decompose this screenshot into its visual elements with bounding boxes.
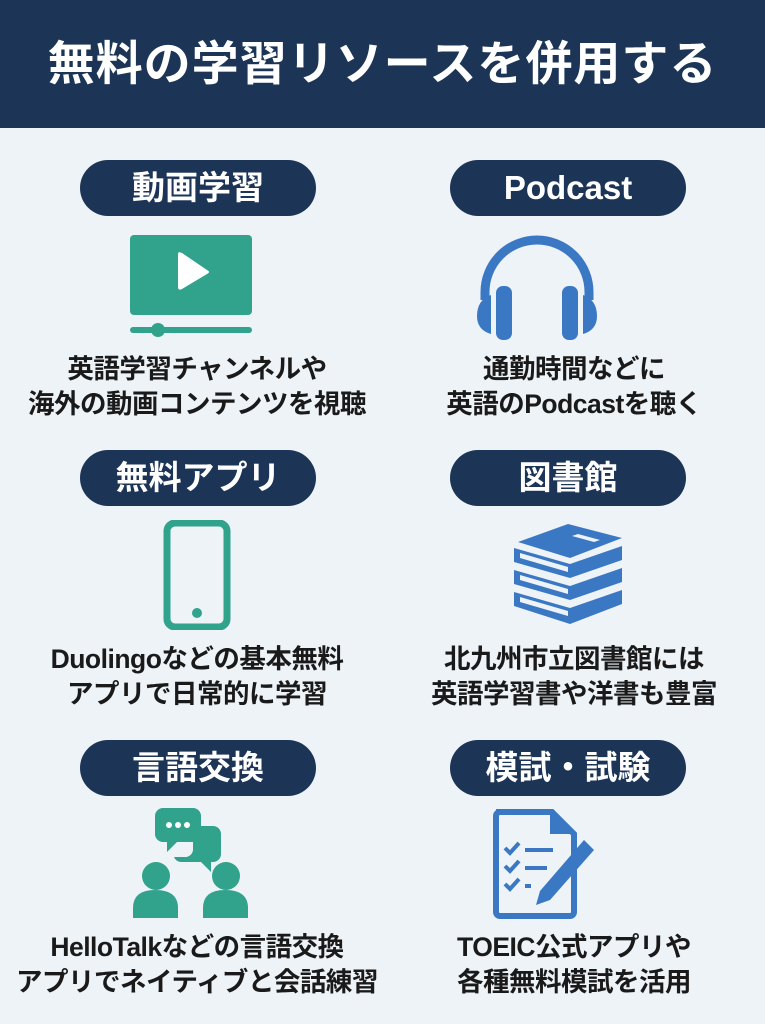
text: library bbox=[431, 644, 717, 709]
title bbox=[0, 0, 765, 128]
text: podcast bbox=[446, 354, 702, 419]
panel: video bbox=[28, 160, 366, 419]
panel: podcast bbox=[446, 160, 702, 419]
icon: headphones bbox=[477, 236, 597, 340]
pill: podcast: Podcast bbox=[504, 169, 632, 206]
panel: tests bbox=[450, 740, 691, 997]
panel: exchange bbox=[16, 740, 378, 997]
text: library: 英語学習書や洋書も豊富 bbox=[431, 679, 717, 709]
text: app: Duolingoなどの基本無料 bbox=[51, 644, 343, 674]
text: library: 北九州市立図書館には bbox=[444, 644, 704, 674]
text: tests: 各種無料模試を活用 bbox=[457, 967, 691, 997]
text: tests: TOEIC公式アプリや bbox=[457, 932, 691, 962]
panel: library bbox=[431, 450, 717, 709]
icon: books bbox=[514, 524, 622, 624]
icon: video player bbox=[130, 235, 252, 337]
pill: tests: 模試・試験 bbox=[486, 749, 650, 786]
pill: podcast bbox=[450, 160, 686, 216]
pill: library bbox=[450, 450, 686, 506]
pill: app bbox=[80, 450, 316, 506]
text: video: 英語学習チャンネルや bbox=[67, 354, 327, 384]
icon: people chatting bbox=[133, 808, 248, 918]
panel: app bbox=[51, 450, 344, 709]
pill: app: 無料アプリ bbox=[116, 459, 280, 496]
pill: video bbox=[80, 160, 316, 216]
icon: smartphone bbox=[164, 520, 230, 630]
icon: checklist with pencil bbox=[493, 809, 594, 919]
text: video: 海外の動画コンテンツを視聴 bbox=[28, 389, 366, 419]
pill: exchange: 言語交換 bbox=[132, 749, 264, 786]
text: podcast: 英語のPodcastを聴く bbox=[446, 389, 702, 419]
text: exchange bbox=[16, 932, 378, 997]
text: exchange: HelloTalkなどの言語交換 bbox=[50, 932, 344, 962]
pill: video: 動画学習 bbox=[132, 169, 264, 206]
text: app bbox=[51, 644, 344, 709]
pill: exchange bbox=[80, 740, 316, 796]
text: video bbox=[28, 354, 366, 419]
text: tests bbox=[457, 932, 691, 997]
text: podcast: 通勤時間などに bbox=[483, 354, 665, 384]
text: exchange: アプリでネイティブと会話練習 bbox=[16, 967, 378, 997]
title: 無料の学習リソースを併用する bbox=[48, 37, 717, 90]
pill: tests bbox=[450, 740, 686, 796]
text: app: アプリで日常的に学習 bbox=[67, 679, 327, 709]
pill: library: 図書館 bbox=[518, 459, 618, 496]
